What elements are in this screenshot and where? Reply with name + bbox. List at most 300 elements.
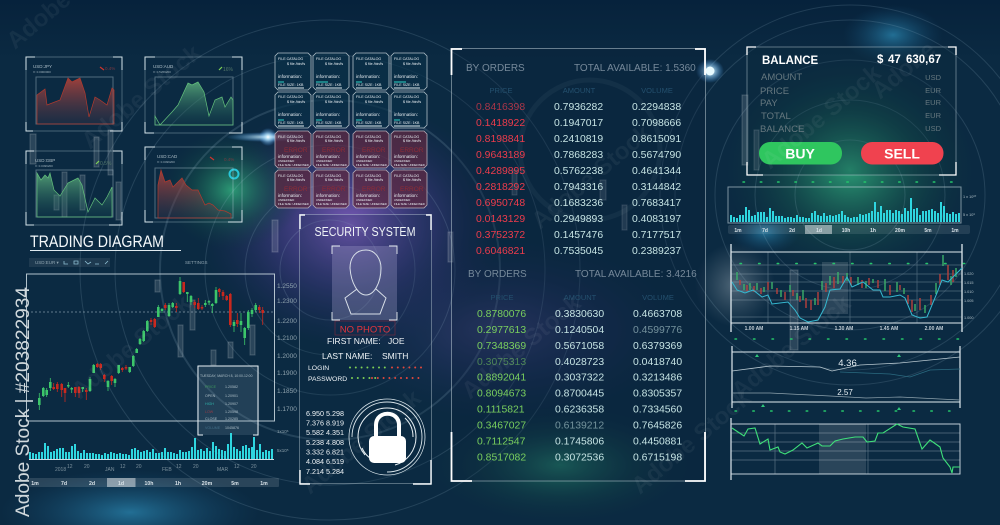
green dot row middle xyxy=(735,338,960,340)
buy amount and volume columns: 0.4599776 xyxy=(633,325,682,336)
file card row 4 error: ERROR xyxy=(400,186,424,193)
panel: USD:JPY mini chart: 0.4% xyxy=(105,66,115,71)
price axis: 1.2100 xyxy=(277,335,297,342)
balance currencies: USD xyxy=(925,73,942,82)
tooltip panel: 1.20907 xyxy=(225,402,238,406)
small candles xyxy=(737,255,956,313)
panel: USD:JPY mini chart xyxy=(26,57,122,131)
file card row 4 error: FILE CATALOG xyxy=(356,174,381,178)
column heads: sell orders: PRICE xyxy=(490,86,512,95)
price labels xyxy=(964,272,974,320)
tooltip panel: 1.20598 xyxy=(225,410,238,414)
buy amount and volume columns xyxy=(555,309,682,464)
buy price column: 0.8892041 xyxy=(477,372,526,384)
table header: buy orders: BY ORDERS xyxy=(468,269,527,280)
number list: 3.332 6.821 xyxy=(306,448,344,456)
timeframe selector right: 1d xyxy=(816,228,822,234)
tooltip panel: CLOSE xyxy=(205,417,218,421)
file card row 2: FILE CATALOG xyxy=(278,95,303,99)
intraday candle chart xyxy=(731,244,974,332)
date axis: 12 xyxy=(120,464,126,470)
sell amount and volume columns: 0.7177517 xyxy=(632,230,681,241)
file card row 4 error: $ file /bin/fs xyxy=(403,178,421,182)
sell amount and volume columns: 0.2294838 xyxy=(632,102,681,113)
file card row 4 error: information: xyxy=(316,193,340,198)
file card row 4 error: $ file /bin/fs xyxy=(365,178,383,182)
file card row 4 error: UNDEFINED xyxy=(394,198,410,202)
main candlestick chart xyxy=(26,274,297,421)
name fields xyxy=(322,336,408,361)
timeframe selector left: 20m xyxy=(202,481,213,487)
buy amount and volume columns: 0.5671058 xyxy=(555,341,604,352)
file card row 4 error: FILE CATALOG xyxy=(278,174,303,178)
panel: USD:CAD mini chart: X: 0.0499200 xyxy=(157,160,175,164)
sell button xyxy=(861,142,944,164)
file card row 4 error: $ file /bin/fs xyxy=(287,178,305,182)
sell amount and volume columns: 0.7936282 xyxy=(554,102,603,113)
icon: padlock with rings xyxy=(349,399,425,475)
file card row 4 error: ERROR xyxy=(322,186,346,193)
date axis: 20 xyxy=(136,464,142,470)
balance rows: PRICE xyxy=(760,86,789,97)
tooltip panel: 1045876 xyxy=(225,426,239,430)
time labels: 1.30 AM xyxy=(835,326,853,332)
file card row 1: FILE SIZE: 1KB xyxy=(278,83,304,87)
volume bars right xyxy=(728,187,977,223)
file card row 2: FILE SIZE: 1KB xyxy=(316,121,342,125)
sell amount and volume columns: 0.7943316 xyxy=(554,182,603,193)
photo placeholder xyxy=(332,246,397,320)
cyan indicator line xyxy=(732,268,962,322)
file card row 2: information: xyxy=(356,112,380,117)
price axis xyxy=(277,283,297,413)
balance currencies: EUR xyxy=(925,98,942,107)
file card row 3 error: FILE CATALOG xyxy=(316,135,341,139)
tooltip panel: 1.20582 xyxy=(225,385,238,389)
balance heading: 47 xyxy=(888,54,901,66)
tooltip panel: TUESDAY, MARCH 8, 10:00-12:00 xyxy=(200,374,253,378)
sell price column: 0.2818292 xyxy=(476,182,525,193)
file card row 1: information: xyxy=(394,74,418,79)
sell amount and volume columns xyxy=(554,102,681,257)
number list: 6.950 5.298 xyxy=(306,409,344,418)
timeframe selector right: 20m xyxy=(895,228,906,234)
number list: 4.084 6.519 xyxy=(306,457,344,466)
price axis: 1.1900 xyxy=(277,370,297,377)
sell button: SELL xyxy=(884,146,920,162)
date axis xyxy=(55,464,257,473)
file card row 3 error: information: xyxy=(394,154,418,159)
timeframe selector right: 10h xyxy=(842,228,850,234)
file card row 3 error: ERROR xyxy=(400,147,424,154)
file card row 4 error: UNDEFINED xyxy=(316,198,332,202)
file card row 2: $ file /bin/fs xyxy=(287,100,305,104)
volume bars: 5x10⁵ xyxy=(277,448,289,453)
file card row 3 error: FILE SIZE: UNDEFINED xyxy=(394,163,425,167)
sell price column: 0.9643189 xyxy=(476,150,525,161)
timeframe selector left xyxy=(29,478,279,487)
dual line chart xyxy=(732,346,960,410)
timeframe selector left: 2d xyxy=(89,481,95,487)
buy amount and volume columns: 0.4028723 xyxy=(555,357,604,368)
file card row 1: $ file /bin/fs xyxy=(365,62,383,66)
balance rows: PAY xyxy=(760,98,778,109)
file card row 4 error: FILE SIZE: UNDEFINED xyxy=(356,202,387,206)
panel: USD:GBP mini chart: X: 0.0499200 xyxy=(35,164,53,168)
timeframe selector left: 1m xyxy=(31,481,39,487)
date axis: 12 xyxy=(234,464,240,470)
volume bars xyxy=(29,429,289,460)
file card row 1: FILE SIZE: 1KB xyxy=(316,83,342,87)
name fields: JOE xyxy=(388,336,405,346)
buy amount and volume columns: 0.6715198 xyxy=(633,452,682,464)
buy amount and volume columns: 0.3213486 xyxy=(633,372,682,384)
buy amount and volume columns: 0.6139212 xyxy=(555,420,604,432)
timeframe selector left: 1d xyxy=(118,481,124,487)
file card row 2: FILE SIZE: 1KB xyxy=(394,121,420,125)
balance heading: BALANCE xyxy=(762,55,819,67)
sell amount and volume columns: 0.1683236 xyxy=(554,198,603,209)
file card row 2: FILE CATALOG xyxy=(356,95,381,99)
file card row 3 error: $ file /bin/fs xyxy=(403,139,421,143)
decorative flares xyxy=(226,59,724,178)
file card row 3 error: FILE SIZE: UNDEFINED xyxy=(316,163,347,167)
price axis: 1.1700 xyxy=(277,406,297,413)
name fields: FIRST NAME: xyxy=(327,336,381,346)
heading: trading diagram: TRADING DIAGRAM xyxy=(30,233,164,251)
price labels: 1.015 xyxy=(964,281,974,285)
timeframe selector right: 1m xyxy=(734,228,742,234)
file card row 1: information: xyxy=(356,74,380,79)
buy price column: 0.7112547 xyxy=(477,436,526,448)
dual line chart: 2.57 xyxy=(837,388,853,397)
time labels: 1.00 AM xyxy=(745,326,763,332)
file card row 3 error: information: xyxy=(356,154,380,159)
timeframe selector right: 2d xyxy=(789,228,795,234)
sell amount and volume columns: 0.2949893 xyxy=(554,214,603,225)
timeframe selector right xyxy=(728,225,970,234)
number list xyxy=(306,409,344,476)
timeframe selector right: 1h xyxy=(870,228,876,234)
file card row 3 error: UNDEFINED xyxy=(356,159,372,163)
date axis: 20 xyxy=(251,464,257,470)
price labels: 1.000 xyxy=(964,316,974,320)
buy button: BUY xyxy=(785,146,815,162)
file card row 4 error: FILE CATALOG xyxy=(316,174,341,178)
buy price column: 0.8094673 xyxy=(477,388,526,400)
sell amount and volume columns: 0.3144842 xyxy=(632,182,681,193)
panel: USD:JPY mini chart: USD:JPY xyxy=(33,64,52,69)
file card row 3 error: ERROR xyxy=(322,147,346,154)
file card row 4 error: information: xyxy=(394,193,418,198)
buy amount and volume columns: 0.6236358 xyxy=(555,404,604,416)
heading: security system: SECURITY SYSTEM xyxy=(314,225,416,239)
sell price column: 0.8416398 xyxy=(476,102,525,113)
file card row 3 error: UNDEFINED xyxy=(278,159,294,163)
balance currencies: EUR xyxy=(925,86,942,95)
toolbar xyxy=(29,258,208,267)
buy amount and volume columns: 0.6379369 xyxy=(633,341,682,352)
file card row 3 error: $ file /bin/fs xyxy=(365,139,383,143)
file card row 4 error: FILE SIZE: UNDEFINED xyxy=(316,202,347,206)
file card row 3 error: $ file /bin/fs xyxy=(325,139,343,143)
buy amount and volume columns: 0.7334560 xyxy=(633,404,682,416)
table header: sell orders xyxy=(466,63,696,74)
watermark: diagonal marks: Adobe Stock xyxy=(627,384,757,500)
login and password strength dots: LOGIN xyxy=(308,365,329,372)
file card row 3 error: FILE CATALOG xyxy=(394,135,419,139)
panel: security system xyxy=(300,214,432,484)
file card row 3 error: information: xyxy=(278,154,302,159)
sell amount and volume columns: 0.1947017 xyxy=(554,118,603,129)
file card row 2: information: xyxy=(278,112,302,117)
balance currencies: USD xyxy=(925,124,942,133)
sell amount and volume columns: 0.5762238 xyxy=(554,166,603,177)
sell price column: 0.3752372 xyxy=(476,230,525,241)
panel: USD:JPY mini chart: X: 0.0000000 xyxy=(33,70,51,74)
timeframe selector right: 7d xyxy=(762,228,768,234)
file card row 2: FILE CATALOG xyxy=(316,95,341,99)
price axis: 1.1850 xyxy=(277,388,297,395)
name fields: LAST NAME: xyxy=(322,351,372,361)
volume bars right: 5 x 10⁹ xyxy=(963,213,975,217)
buy amount and volume columns: 0.7645826 xyxy=(633,420,682,432)
file card row 3 error: ERROR xyxy=(284,147,308,154)
buy amount and volume columns: 0.1745806 xyxy=(555,436,604,448)
buy price column: 0.7348369 xyxy=(477,341,526,352)
buy price column xyxy=(477,309,526,464)
timeframe selector left: 5m xyxy=(231,481,239,487)
sell price column xyxy=(476,102,525,257)
buy amount and volume columns: 0.8305357 xyxy=(633,388,682,400)
watermark: diagonal marks: Adobe Stock xyxy=(297,384,427,500)
watermark: diagonal marks: Adobe Stock xyxy=(77,39,207,155)
file card row 3 error: information: xyxy=(316,154,340,159)
tooltip panel: 1.20285 xyxy=(225,417,238,421)
buy price column: 0.3075313 xyxy=(477,357,526,368)
date axis: 12 xyxy=(67,464,73,470)
price axis: 1.2000 xyxy=(277,353,297,360)
buy price column: 0.2977613 xyxy=(477,325,526,336)
sell amount and volume columns: 0.4083197 xyxy=(632,214,681,225)
panel: USD:CAD mini chart: USD:CAD xyxy=(157,154,178,159)
file card row 3 error: FILE CATALOG xyxy=(278,135,303,139)
balance rows: BALANCE xyxy=(760,124,804,135)
timeframe selector left: 7d xyxy=(61,481,67,487)
green dots xyxy=(740,262,965,264)
file card row 1: FILE CATALOG xyxy=(278,57,303,61)
buy amount and volume columns: 0.1240504 xyxy=(555,325,604,336)
no photo label xyxy=(335,321,395,336)
sell amount and volume columns: 0.7535045 xyxy=(554,246,603,257)
watermark: diagonal marks: Adobe Stock xyxy=(67,289,197,405)
number list: 7.376 8.919 xyxy=(306,418,344,428)
date axis: 12 xyxy=(176,464,182,470)
balance heading xyxy=(762,54,941,67)
time labels: 2.00 AM xyxy=(925,326,943,332)
buy amount and volume columns: 0.4450881 xyxy=(633,436,682,448)
number list: 5.582 4.351 xyxy=(306,428,344,437)
green line chart xyxy=(731,418,960,480)
sell amount and volume columns: 0.7098666 xyxy=(632,118,681,129)
background ghost candles xyxy=(30,95,798,365)
sell price column: 0.0143129 xyxy=(476,214,525,225)
price axis: 1.2200 xyxy=(277,318,297,325)
file card row 3 error: UNDEFINED xyxy=(394,159,410,163)
sell amount and volume columns: 0.4641344 xyxy=(632,166,681,177)
file card row 1: FILE SIZE: 1KB xyxy=(394,83,420,87)
buy price column: 0.1115821 xyxy=(477,404,525,416)
date axis: JAN xyxy=(105,467,115,473)
file card row 4 error: information: xyxy=(278,193,302,198)
date axis: FEB xyxy=(162,467,172,473)
price labels: 1.005 xyxy=(964,299,974,303)
balance currencies: EUR xyxy=(925,111,942,120)
file card row 3 error: UNDEFINED xyxy=(316,159,332,163)
file card row 4 error: FILE SIZE: UNDEFINED xyxy=(278,202,309,206)
file card row 4 error: information: xyxy=(356,193,380,198)
panel: USD:CAD mini chart xyxy=(145,147,242,222)
column heads: buy orders: VOLUME xyxy=(642,293,674,302)
sell amount and volume columns: 0.1457476 xyxy=(554,230,603,241)
number list: 5.238 4.808 xyxy=(306,438,344,447)
table header: sell orders: BY ORDERS xyxy=(466,63,525,74)
panel: USD:AUD mini chart: X: 0.5269200 xyxy=(153,70,171,74)
watermark: stock id: Adobe Stock | #203822934 xyxy=(12,287,34,517)
date axis: 20 xyxy=(193,464,199,470)
buy amount and volume columns: 0.3037322 xyxy=(555,372,604,384)
price axis: 1.2550 xyxy=(277,283,297,290)
timeframe selector left: 10h xyxy=(145,481,153,487)
panel: USD:GBP mini chart: USD:GBP xyxy=(35,158,55,163)
file card row 1: FILE SIZE: 1KB xyxy=(356,83,382,87)
panel: order book xyxy=(452,48,706,481)
file card row 4 error: FILE CATALOG xyxy=(394,174,419,178)
file card row 2: FILE SIZE: 1KB xyxy=(356,121,382,125)
tooltip panel: 1.20901 xyxy=(225,394,238,398)
time labels: 1.45 AM xyxy=(880,326,898,332)
file card row 3 error: FILE SIZE: UNDEFINED xyxy=(278,163,309,167)
column heads: buy orders: AMOUNT xyxy=(564,293,597,302)
tooltip panel: HIGH xyxy=(205,402,214,406)
file card row 3 error: FILE CATALOG xyxy=(356,135,381,139)
panel: USD:AUD mini chart: USD:AUD xyxy=(153,64,174,69)
file card row 2: $ file /bin/fs xyxy=(365,100,383,104)
table header: sell orders: TOTAL AVAILABLE: 1.5360 xyxy=(574,63,696,74)
login and password strength dots xyxy=(308,365,422,383)
tooltip panel: VOLUME xyxy=(205,426,221,430)
tooltip panel: PRICE xyxy=(205,385,217,389)
date axis: 2018 xyxy=(55,467,66,473)
column heads: buy orders xyxy=(491,293,674,302)
file card row 2 xyxy=(275,92,427,128)
table header: buy orders: TOTAL AVAILABLE: 3.4216 xyxy=(575,269,697,280)
file card row 4 error: ERROR xyxy=(284,186,308,193)
tooltip panel: LOW xyxy=(205,410,214,414)
buy amount and volume columns: 0.4663708 xyxy=(633,309,682,320)
number list: 7.214 5.284 xyxy=(306,467,344,476)
file card row 3 error xyxy=(275,131,427,168)
green dot row lower xyxy=(735,410,950,412)
buy amount and volume columns: 0.0418740 xyxy=(633,357,682,368)
sell price column: 0.1418922 xyxy=(476,118,525,129)
file card row 1: FILE CATALOG xyxy=(316,57,341,61)
sell amount and volume columns: 0.7683417 xyxy=(632,198,681,209)
time labels xyxy=(745,326,943,332)
file card row 2: FILE CATALOG xyxy=(394,95,419,99)
time labels: 1.15 AM xyxy=(790,326,808,332)
file card row 1: $ file /bin/fs xyxy=(287,62,305,66)
tooltip panel: OPEN xyxy=(205,394,216,398)
buy amount and volume columns: 0.3072536 xyxy=(555,452,604,464)
balance heading: 630,67 xyxy=(906,54,941,66)
price axis: 1.2300 xyxy=(277,298,297,305)
tooltip panel xyxy=(197,366,259,435)
sell amount and volume columns: 0.2410819 xyxy=(554,134,603,145)
buy amount and volume columns: 0.3830630 xyxy=(555,309,604,320)
file card row 3 error: FILE SIZE: UNDEFINED xyxy=(356,163,387,167)
file card row 4 error: $ file /bin/fs xyxy=(325,178,343,182)
sell price column: 0.6950748 xyxy=(476,198,525,209)
timeframe selector left: 1h xyxy=(175,481,181,487)
green candles xyxy=(39,277,256,410)
panel: USD:AUD mini chart xyxy=(145,57,242,133)
file card row 3 error: ERROR xyxy=(362,147,386,154)
sell amount and volume columns: 0.5674790 xyxy=(632,150,681,161)
panel: USD:GBP mini chart: 0.5% xyxy=(100,161,112,167)
file card row 4 error: UNDEFINED xyxy=(356,198,372,202)
price labels: 1.020 xyxy=(964,272,974,276)
file card row 1: $ file /bin/fs xyxy=(403,62,421,66)
buy price column: 0.3467027 xyxy=(477,420,526,432)
file card row 4 error: UNDEFINED xyxy=(278,198,294,202)
sell price column: 0.4289895 xyxy=(476,166,525,177)
sell amount and volume columns: 0.2389237 xyxy=(632,246,681,257)
toolbar: USD:EUR ▾ xyxy=(35,260,60,265)
watermark: diagonal marks: Adobe Stock xyxy=(527,119,657,235)
volume bars: 1x10⁶ xyxy=(277,429,289,434)
panel: USD:GBP mini chart xyxy=(26,151,122,225)
sell amount and volume columns: 0.7868283 xyxy=(554,150,603,161)
volume bars right: 1 x 10¹⁰ xyxy=(963,195,977,199)
buy button xyxy=(759,142,842,164)
file card row 2: information: xyxy=(394,112,418,117)
balance rows xyxy=(760,72,804,135)
file card row 1 xyxy=(275,53,427,90)
file card row 4 error: ERROR xyxy=(362,186,386,193)
column heads: sell orders: AMOUNT xyxy=(563,86,596,95)
sell amount and volume columns: 0.8615091 xyxy=(632,134,681,145)
watermark: diagonal marks: Adobe Stock xyxy=(457,289,587,405)
balance rows: TOTAL xyxy=(761,111,791,122)
date axis: 20 xyxy=(84,464,90,470)
file card row 2: FILE SIZE: 1KB xyxy=(278,121,304,125)
price labels: 1.010 xyxy=(964,290,974,294)
file card row 4 error xyxy=(275,170,427,208)
file card row 2: $ file /bin/fs xyxy=(403,100,421,104)
watermark: diagonal marks: Adobe Stock xyxy=(727,289,857,405)
timeframe selector right: 5m xyxy=(924,228,932,234)
toolbar: SETTINGS xyxy=(185,260,208,265)
file card row 4 error: FILE SIZE: UNDEFINED xyxy=(394,202,425,206)
panel: file catalog grid xyxy=(275,53,427,208)
file card row 1: FILE CATALOG xyxy=(394,57,419,61)
timeframe selector left: 1m xyxy=(260,481,268,487)
red candles xyxy=(54,282,263,402)
buy price column: 0.8780076 xyxy=(477,309,526,320)
file card row 1: $ file /bin/fs xyxy=(325,62,343,66)
panel: USD:CAD mini chart: 0.4% xyxy=(224,157,234,162)
